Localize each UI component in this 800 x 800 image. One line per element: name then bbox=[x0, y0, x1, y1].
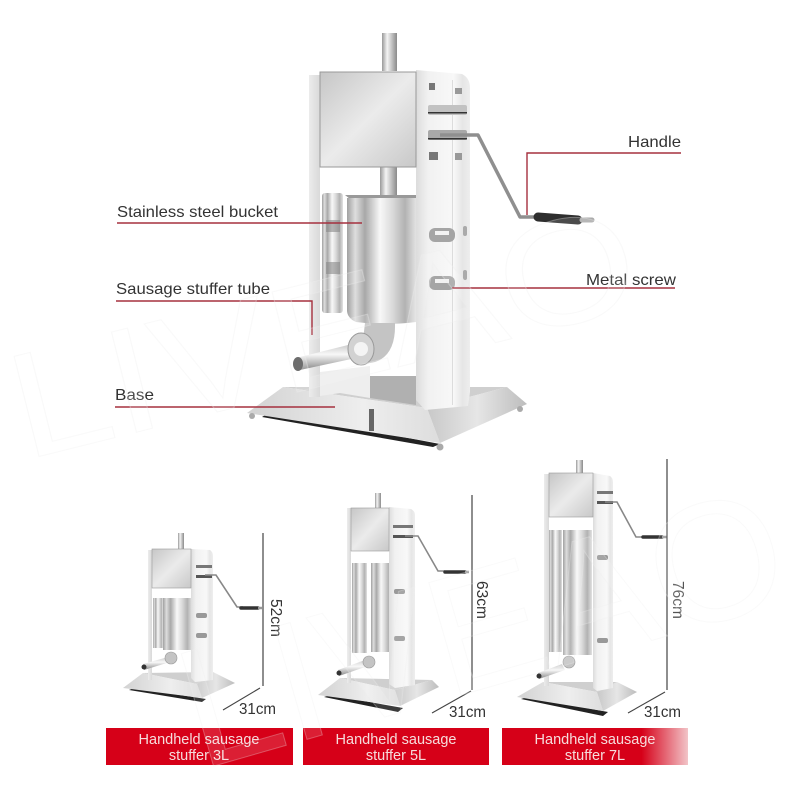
height dimension 52cm: 52cm bbox=[267, 599, 284, 637]
outlet and stuffer tube bbox=[293, 323, 395, 371]
head box bbox=[320, 72, 416, 167]
depth dimension 31cm: 31cm bbox=[644, 704, 681, 721]
piston rod bbox=[380, 165, 397, 201]
label banner 7L: stuffer 7L bbox=[565, 748, 625, 764]
height dimension 76cm: 76cm bbox=[669, 581, 686, 619]
watermark: lower LIVEAO: LIVEAO bbox=[158, 452, 800, 800]
label banner 7L: Handheld sausage bbox=[535, 732, 655, 748]
depth dimension 31cm bbox=[223, 688, 276, 718]
label banner 5L: stuffer 5L bbox=[366, 748, 426, 764]
label banner 7L bbox=[502, 728, 688, 765]
bucket bbox=[345, 195, 416, 324]
product: 7L stuffer bbox=[502, 459, 688, 765]
label banner 3L bbox=[106, 728, 293, 765]
main rod bbox=[382, 33, 397, 71]
base plate bbox=[247, 376, 527, 450]
machine 7L bbox=[517, 460, 667, 716]
crank handle bbox=[440, 135, 592, 220]
label banner 5L bbox=[303, 728, 489, 765]
lower back panel bbox=[320, 366, 370, 398]
label banner 3L: stuffer 3L bbox=[169, 748, 229, 764]
callout: Sausage stuffer tube: Sausage stuffer tube bbox=[116, 281, 270, 298]
height dimension 63cm: 63cm bbox=[473, 581, 490, 619]
callout: Base: Base bbox=[115, 387, 154, 404]
product: 3L stuffer bbox=[106, 533, 293, 765]
depth dimension 31cm bbox=[432, 691, 486, 721]
callout: Handle: Handle bbox=[628, 134, 681, 151]
product: 5L stuffer bbox=[303, 493, 490, 765]
left column bbox=[309, 75, 320, 397]
callout: Sausage stuffer tube bbox=[116, 281, 312, 335]
depth dimension 31cm bbox=[628, 692, 681, 721]
label banner 5L: Handheld sausage bbox=[336, 732, 456, 748]
right side panel bbox=[416, 70, 470, 410]
depth dimension 31cm: 31cm bbox=[239, 701, 276, 718]
main machine: stainless steel sausage stuffer bbox=[247, 33, 592, 450]
depth dimension 31cm: 31cm bbox=[449, 704, 486, 721]
machine 5L bbox=[318, 493, 469, 712]
rear cylinder bbox=[322, 193, 343, 313]
callout: Handle bbox=[527, 134, 681, 215]
label banner 3L: Handheld sausage bbox=[139, 732, 259, 748]
machine 3L bbox=[123, 533, 262, 702]
callout: Metal screw: Metal screw bbox=[586, 272, 676, 289]
watermark: upper LIVEAO: LIVEAO bbox=[0, 173, 654, 491]
callout: Stainless steel bucket: Stainless steel bucket bbox=[117, 204, 279, 221]
